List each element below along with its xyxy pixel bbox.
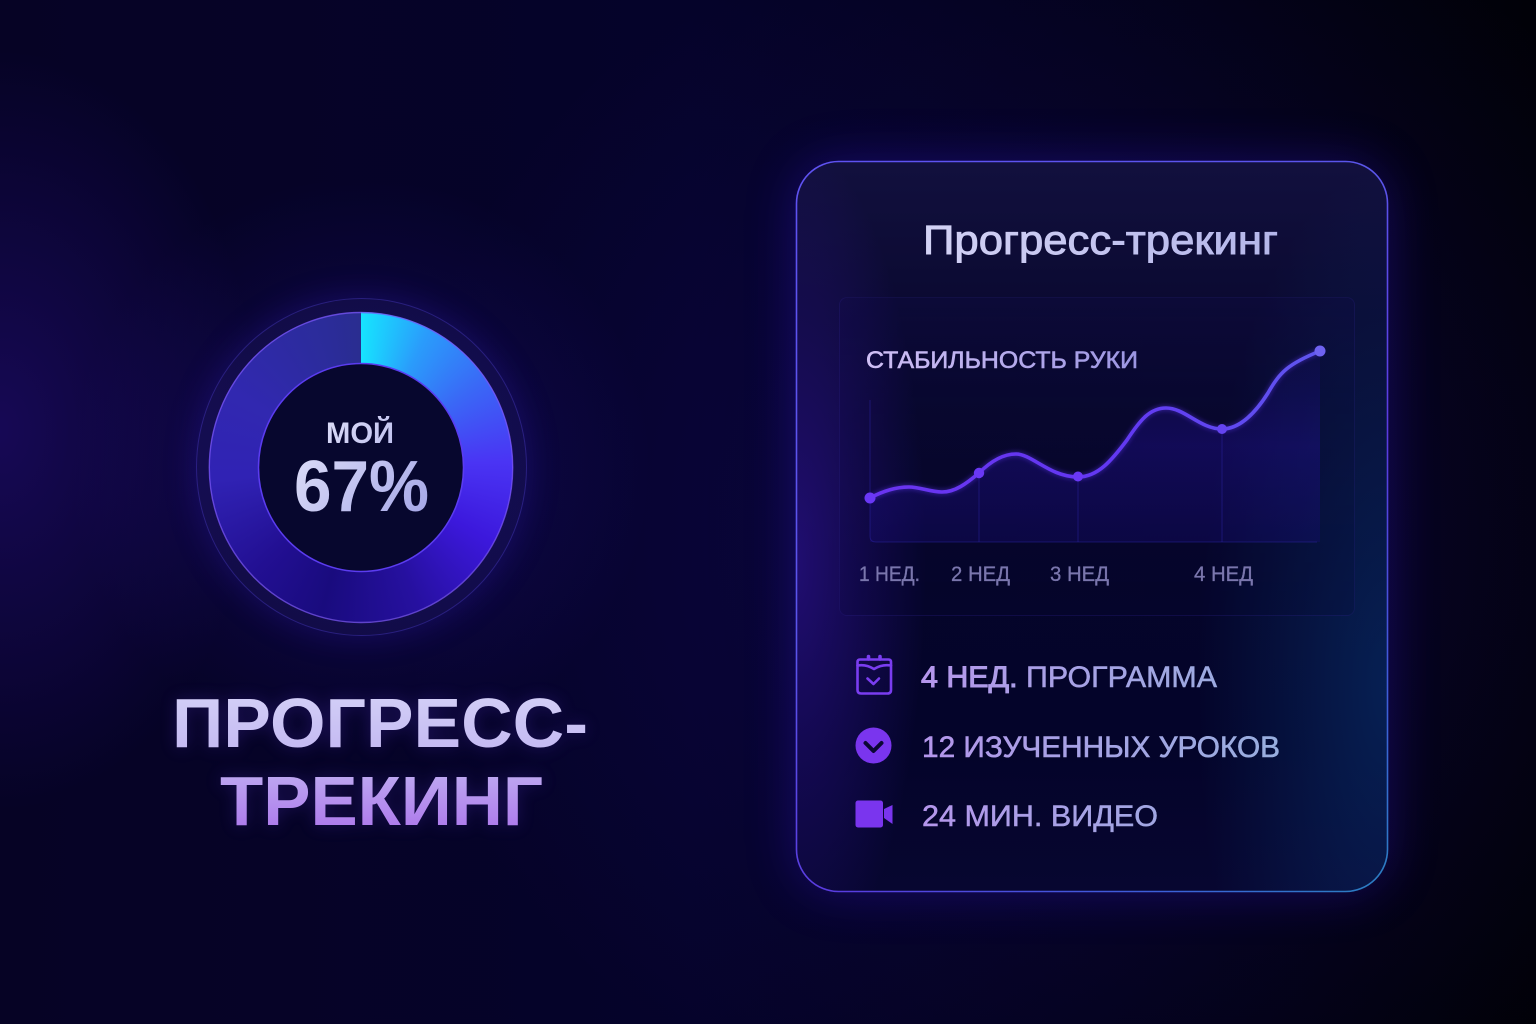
line series: [870, 351, 1320, 498]
area under curve: [870, 351, 1320, 542]
axis labels: 3 НЕД: [1050, 563, 1109, 586]
data points: [864, 346, 1326, 504]
axis labels: 2 НЕД: [951, 563, 1010, 586]
main title: ПРОГРЕСС-: [172, 684, 588, 762]
panel: donut progress: [184, 286, 540, 648]
axis labels: 1 НЕД.: [859, 563, 920, 586]
main title: [170, 684, 588, 840]
card border: [796, 160, 1388, 892]
donut chart: [209, 312, 513, 622]
chart title: СТАБИЛЬНОСТЬ РУКИ: [866, 347, 1138, 374]
axis labels: 4 НЕД: [1194, 563, 1253, 586]
donut halo ring: [196, 298, 527, 636]
icon: check circle: [856, 728, 892, 764]
axis labels: [859, 563, 1253, 586]
main title: ТРЕКИНГ: [220, 762, 543, 840]
panel: line chart: [839, 297, 1355, 616]
item: 24 minutes: 24 МИН. ВИДЕО: [922, 800, 1158, 833]
card heading: Прогресс-трекинг: [923, 217, 1278, 263]
panel: progress card: [796, 161, 1388, 892]
list: program facts: [856, 654, 1280, 833]
value: 67%: 67%: [294, 447, 429, 527]
icon: calendar: [858, 656, 891, 694]
icon: video: [856, 800, 892, 828]
donut rim lines and center labels: [208, 312, 514, 624]
item: 4 weeks: 4 НЕД. ПРОГРАММА: [921, 661, 1217, 694]
label: мой: МОЙ: [326, 416, 394, 450]
item: 12 lessons: 12 ИЗУЧЕННЫХ УРОКОВ: [922, 731, 1280, 764]
